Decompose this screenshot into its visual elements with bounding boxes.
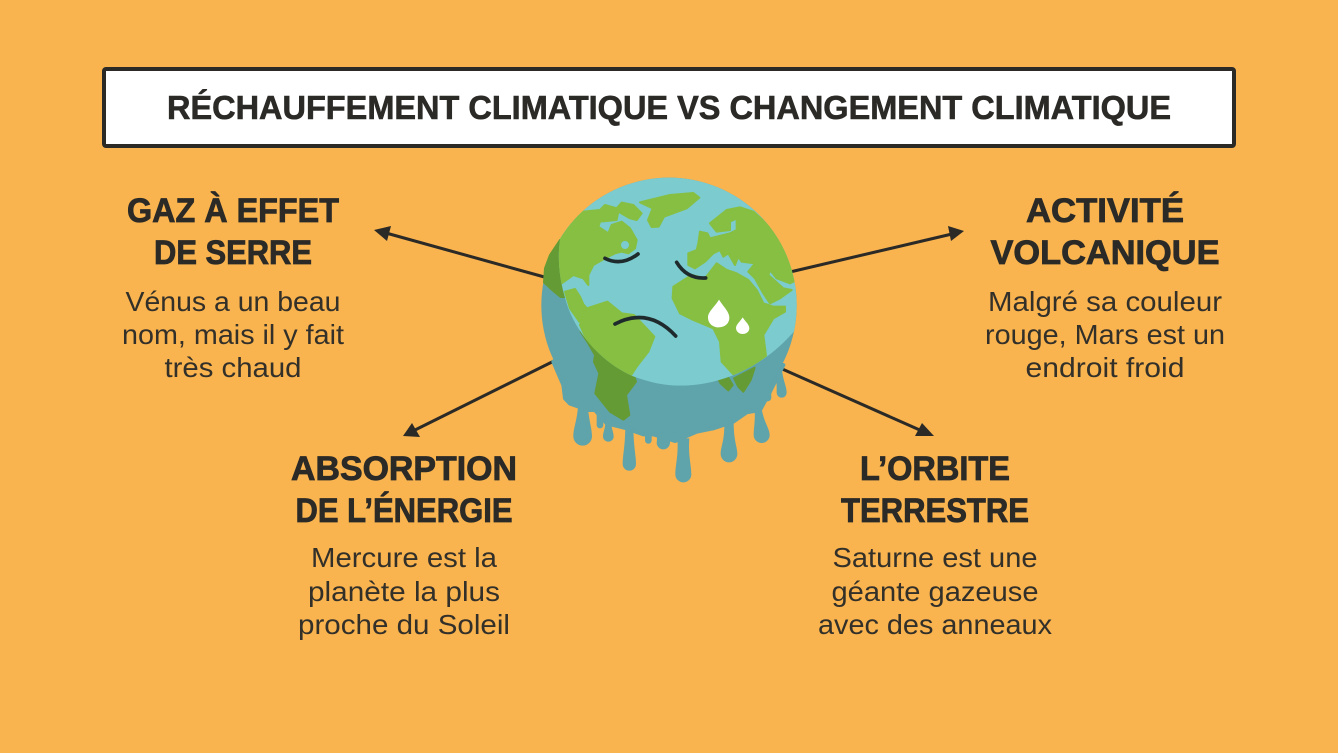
description: Mercury: planète la plus bbox=[308, 576, 500, 607]
description: Mars: rouge, Mars est un bbox=[985, 319, 1225, 350]
description: Mars bbox=[985, 286, 1225, 383]
face: sad mouth bbox=[615, 318, 676, 336]
heading: volcanic activity: ACTIVITÉ bbox=[1026, 192, 1184, 230]
description: Saturn: géante gazeuse bbox=[832, 576, 1038, 607]
description: Mercury: Mercure est la bbox=[311, 542, 498, 573]
description: Mercury bbox=[298, 542, 510, 640]
text block: greenhouse gases bbox=[122, 192, 344, 383]
face: small tear bbox=[736, 317, 749, 334]
description: Mercury: proche du Soleil bbox=[298, 609, 510, 640]
description: Mars: Malgré sa couleur bbox=[988, 286, 1222, 317]
heading: volcanic activity bbox=[990, 192, 1220, 272]
description: Mars: endroit froid bbox=[1026, 352, 1184, 383]
heading: volcanic activity: VOLCANIQUE bbox=[990, 234, 1220, 272]
description: Saturn bbox=[818, 542, 1052, 640]
arrow: to volcanic activity bbox=[790, 226, 964, 272]
continent: South America bbox=[580, 302, 654, 374]
face: right eye bbox=[677, 262, 706, 278]
heading: earth orbit bbox=[841, 450, 1029, 530]
heading: energy absorption: DE L’ÉNERGIE bbox=[296, 492, 512, 530]
ocean: inland sea bbox=[621, 241, 629, 249]
heading: greenhouse gases: DE SERRE bbox=[154, 234, 312, 272]
heading: earth orbit: TERRESTRE bbox=[841, 492, 1029, 530]
continent: Central America bbox=[565, 289, 590, 322]
arrow: to earth orbit bbox=[780, 368, 934, 436]
continent: Greenland bbox=[640, 193, 699, 227]
description: Saturn: avec des anneaux bbox=[818, 609, 1052, 640]
heading: earth orbit: L’ORBITE bbox=[860, 450, 1010, 488]
heading: greenhouse gases bbox=[127, 192, 339, 272]
title banner bbox=[104, 69, 1234, 146]
description: Venus bbox=[122, 286, 344, 383]
face: large tear bbox=[708, 300, 729, 327]
globe shadow disk bbox=[541, 178, 797, 433]
continent: Eurasia bbox=[688, 207, 797, 303]
arrow: to energy absorption bbox=[403, 360, 556, 437]
description: Venus: nom, mais il y fait bbox=[122, 319, 344, 350]
text block: earth orbit bbox=[818, 450, 1052, 640]
face: left eye bbox=[605, 254, 638, 262]
text block: volcanic activity bbox=[985, 192, 1225, 383]
melting drips bbox=[553, 362, 787, 482]
heading: energy absorption: ABSORPTION bbox=[291, 450, 517, 488]
arrow: to greenhouse gases bbox=[374, 226, 548, 278]
description: Venus: très chaud bbox=[164, 352, 302, 383]
dark continent: left edge bbox=[544, 240, 566, 297]
icon: melting sad globe bbox=[540, 175, 800, 482]
title banner: RÉCHAUFFEMENT CLIMATIQUE VS CHANGEMENT CLIMATIQUE bbox=[167, 89, 1171, 126]
continent: Africa bbox=[673, 263, 785, 374]
dark continent: Africa tip bbox=[717, 368, 755, 392]
description: Venus: Vénus a un beau bbox=[126, 286, 340, 317]
dark continent: South America bbox=[581, 332, 636, 420]
continent: North America bbox=[553, 203, 642, 285]
description: Saturn: Saturne est une bbox=[832, 542, 1038, 573]
heading: energy absorption bbox=[291, 450, 517, 530]
lit side of globe bbox=[558, 178, 797, 386]
text block: energy absorption bbox=[291, 450, 517, 640]
heading: greenhouse gases: GAZ À EFFET bbox=[127, 192, 339, 230]
